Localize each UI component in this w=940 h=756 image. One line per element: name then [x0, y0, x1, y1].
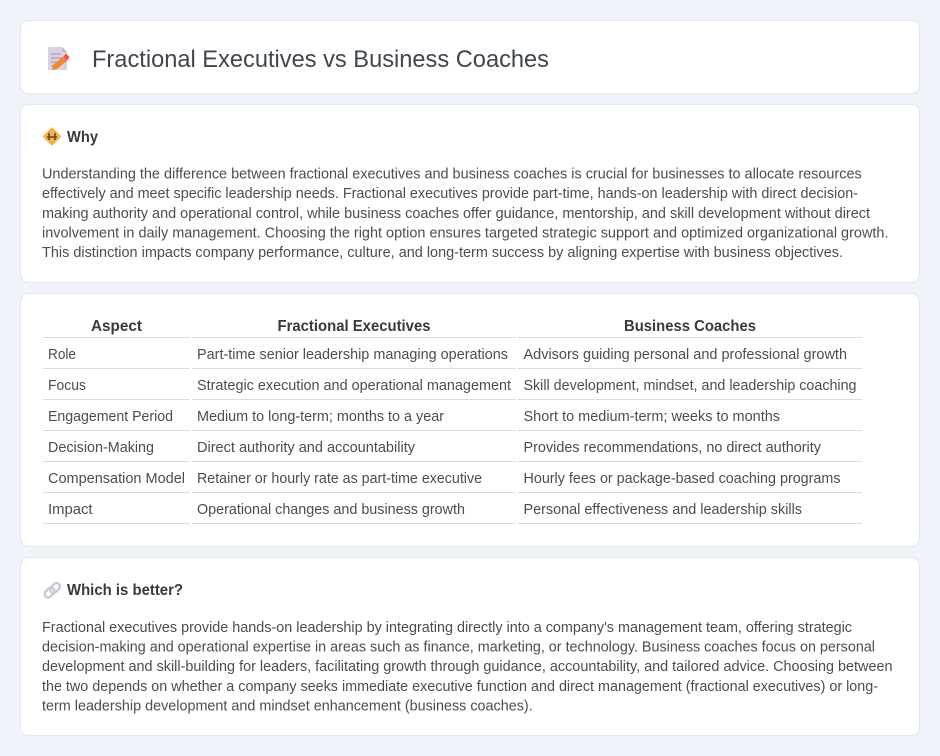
icon: chain link [43, 582, 61, 599]
table row: decision-making: Provides recommendations, no direct authority [524, 440, 822, 456]
panel: why [20, 104, 920, 282]
table header row: Fractional Executives [278, 318, 431, 335]
table row: engagement period: Short to medium-term; weeks to months [524, 409, 780, 425]
icon: warning diamond [44, 128, 60, 145]
table row: focus: Focus [48, 378, 86, 394]
table row: role: Advisors guiding personal and professional growth [524, 347, 847, 363]
table row: compensation model: Compensation Model [48, 471, 185, 487]
table row: engagement period [48, 409, 780, 425]
heading: which is better: Which is better? [67, 582, 183, 599]
heading: why: Why [67, 129, 98, 146]
text block: which is better paragraph: development and skill-building for leaders, facilitating growth through guidance, accountability, and tailored advice. Choosing between [42, 659, 892, 675]
panel: header [20, 20, 920, 94]
table row: focus: Skill development, mindset, and leadership coaching [524, 378, 856, 394]
text block: why paragraph [42, 167, 888, 261]
table row: decision-making: Direct authority and accountability [197, 440, 416, 456]
table row: impact: Personal effectiveness and leadership skills [524, 502, 802, 518]
panel: comparison table [20, 294, 920, 546]
icon: memo with pencil [48, 47, 70, 70]
table header row: Aspect [91, 318, 143, 335]
table row: compensation model: Hourly fees or package-based coaching programs [524, 471, 840, 487]
text block: which is better paragraph: term leadership development and mindset enhancement (business coaches). [42, 698, 533, 714]
text block: why paragraph: Understanding the difference between fractional executives and business coaches is crucial for businesses to allocate resources [42, 167, 862, 183]
text block: which is better paragraph [42, 620, 892, 714]
table row: focus: Strategic execution and operational management [197, 378, 511, 394]
table row: compensation model [48, 471, 840, 487]
table row: focus [48, 378, 856, 394]
text block: which is better paragraph: Fractional executives provide hands-on leadership by integrating directly into a company's management team, offering strategic [42, 620, 852, 636]
table row: role: Role [48, 347, 76, 363]
text block: why paragraph: involvement in daily management. Choosing the right option ensures targeted strategic support and optimized organizational growth. [42, 225, 888, 241]
table row: role [48, 347, 847, 363]
panel: which is better [20, 558, 920, 736]
table header row: Business Coaches [624, 318, 756, 335]
table row: role: Part-time senior leadership managing operations [197, 347, 508, 363]
text block: why paragraph: This distinction impacts company performance, culture, and long-term success by aligning expertise with business objectives. [42, 245, 843, 261]
table header row [91, 318, 756, 335]
table row: impact: Impact [48, 502, 93, 518]
table row: engagement period: Engagement Period [48, 409, 173, 425]
text block: why paragraph: making authority and operational control, while business coaches offer guidance, mentorship, and skill development without direct [42, 206, 870, 222]
table row: impact: Operational changes and business growth [197, 502, 465, 518]
text block: which is better paragraph: decision-making and operational expertise in areas such as finance, marketing, or technology. Business coaches focus on personal [42, 640, 875, 656]
title: Fractional Executives vs Business Coaches [92, 46, 549, 73]
text block: which is better paragraph: the two depends on whether a company seeks immediate executive function and direct management (fractional executives) or long- [42, 679, 878, 695]
table row: decision-making [48, 440, 822, 456]
table row: impact [48, 502, 802, 518]
table row: compensation model: Retainer or hourly rate as part-time executive [197, 471, 482, 487]
text block: why paragraph: effectively and meet specific leadership needs. Fractional executives provide part-time, hands-on leadership with direct decision- [42, 186, 858, 202]
table row: decision-making: Decision-Making [48, 440, 154, 456]
table row: engagement period: Medium to long-term; months to a year [197, 409, 444, 425]
